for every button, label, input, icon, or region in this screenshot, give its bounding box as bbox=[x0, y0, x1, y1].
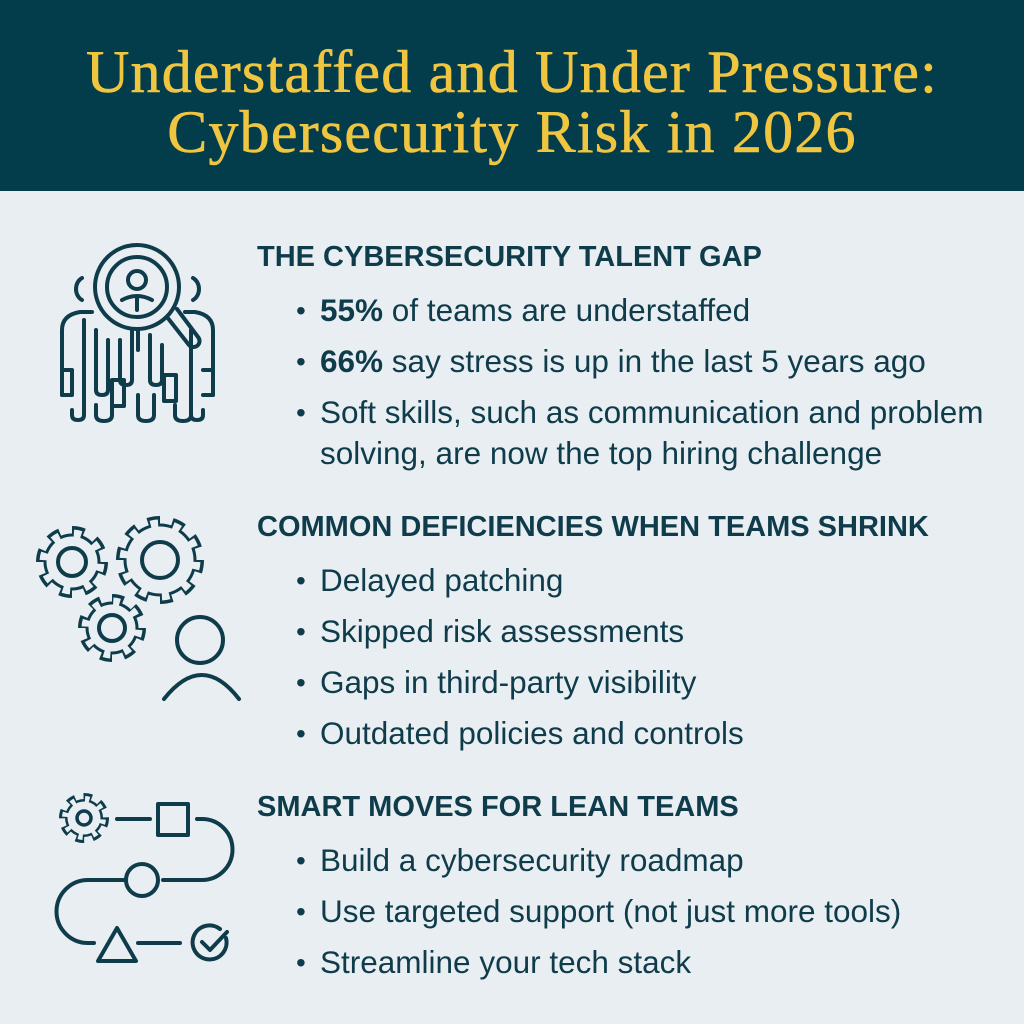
bullets: talent gap: 55% of teams are understaffed bbox=[320, 292, 750, 328]
bullets: smart moves: Use targeted support (not just more tools) bbox=[320, 893, 901, 929]
title: Understaffed and Under Pressure: bbox=[86, 39, 938, 105]
title bbox=[86, 39, 938, 166]
bullets: deficiencies: Delayed patching bbox=[320, 562, 563, 598]
section 2: deficiencies bbox=[257, 511, 929, 751]
bullets: talent gap bbox=[297, 292, 984, 471]
header banner bbox=[0, 0, 1024, 191]
bullets: deficiencies: Skipped risk assessments bbox=[320, 613, 684, 649]
title: Cybersecurity Risk in 2026 bbox=[167, 99, 857, 165]
section 3: smart moves bbox=[257, 791, 901, 980]
bullets: deficiencies bbox=[297, 562, 744, 751]
bullets: deficiencies: Gaps in third-party visibility bbox=[320, 664, 696, 700]
bullets: smart moves: Streamline your tech stack bbox=[320, 944, 691, 980]
bullets: talent gap: 66% say stress is up in the last 5 years ago bbox=[320, 343, 926, 379]
heading: talent gap: THE CYBERSECURITY TALENT GAP bbox=[257, 241, 762, 273]
bullets: talent gap: solving, are now the top hiring challenge bbox=[320, 435, 882, 471]
bullets: smart moves bbox=[297, 842, 901, 980]
heading: deficiencies: COMMON DEFICIENCIES WHEN TEAMS SHRINK bbox=[257, 511, 929, 543]
section 1: talent gap bbox=[257, 241, 984, 471]
bullets: smart moves: Build a cybersecurity roadmap bbox=[320, 842, 744, 878]
heading: smart moves: SMART MOVES FOR LEAN TEAMS bbox=[257, 791, 739, 823]
bullets: talent gap: Soft skills, such as communication and problem bbox=[320, 394, 984, 430]
bullets: deficiencies: Outdated policies and controls bbox=[320, 715, 744, 751]
icon: people with magnifier bbox=[62, 245, 213, 421]
icon: gears and person bbox=[42, 522, 239, 699]
icon: roadmap bbox=[57, 798, 232, 961]
